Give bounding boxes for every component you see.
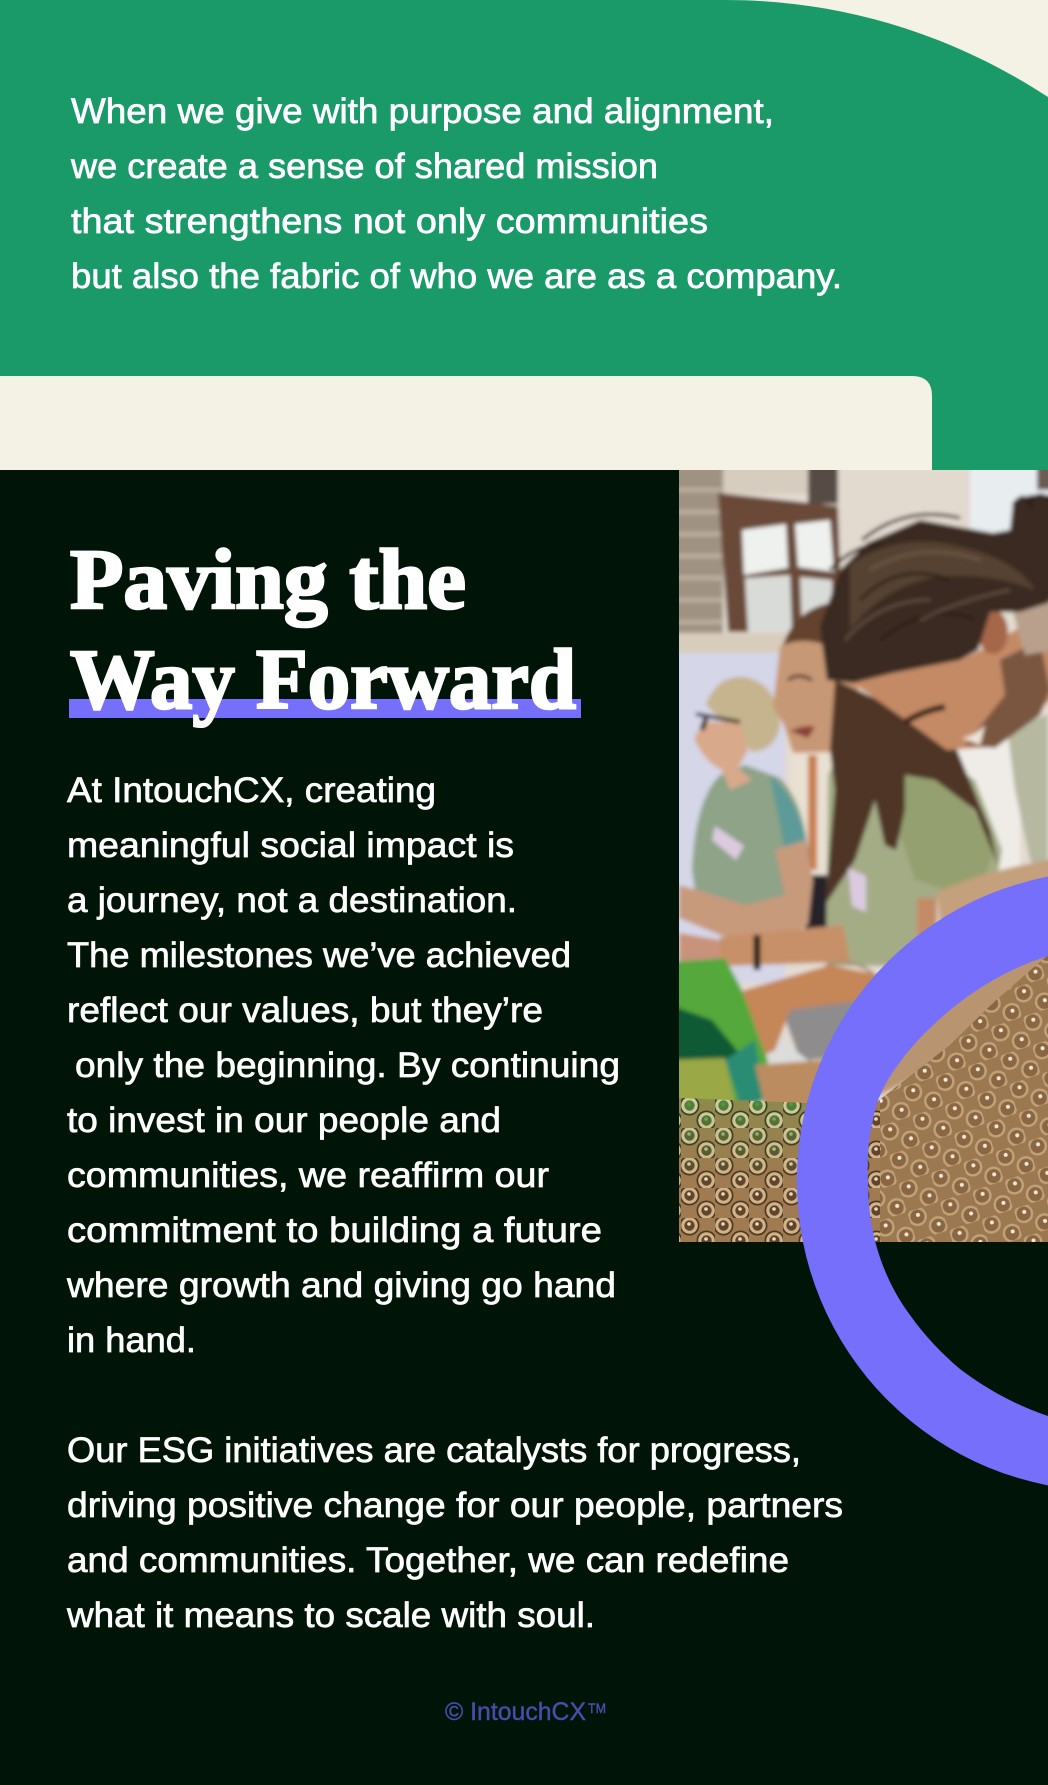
body text: first paragraph: At IntouchCX, creating xyxy=(67,771,436,810)
quote text: but also the fabric of who we are as a company. xyxy=(71,257,842,296)
heading: Paving the Way Forward: Paving the xyxy=(70,531,466,627)
body text: first paragraph: The milestones we’ve achieved xyxy=(67,936,571,975)
decorative purple ring xyxy=(797,871,1048,1491)
footer copyright: © IntouchCX xyxy=(445,1698,586,1726)
body text: second paragraph: driving positive change for our people, partners xyxy=(67,1486,843,1525)
paper bag xyxy=(755,1060,830,1106)
window xyxy=(718,493,842,632)
left woman's arm xyxy=(679,840,813,945)
right woman long hair xyxy=(825,680,998,905)
body text: second paragraph: Our ESG initiatives are catalysts for progress, xyxy=(67,1431,801,1470)
walls xyxy=(722,470,1048,1101)
man's hair xyxy=(820,495,1048,683)
arms xyxy=(720,925,850,966)
ledge and lavender wall xyxy=(670,633,795,653)
body text: first paragraph: meaningful social impact is xyxy=(67,826,514,865)
body text: first paragraph xyxy=(66,771,620,1360)
green bag xyxy=(670,958,768,1104)
footer copyright: TM xyxy=(588,1700,606,1716)
body text: second paragraph: what it means to scale with soul. xyxy=(66,1596,595,1635)
body text: first paragraph: in hand. xyxy=(67,1321,196,1360)
quote text xyxy=(70,92,842,296)
man's shirt xyxy=(1007,715,1048,880)
heading: Paving the Way Forward: Way Forward xyxy=(70,631,576,727)
body text: first paragraph: where growth and giving go hand xyxy=(66,1266,616,1305)
heading underline xyxy=(69,699,581,718)
background: cream top section xyxy=(0,0,1048,470)
body text: first paragraph: only the beginning. By continuing xyxy=(75,1046,620,1085)
quote text: When we give with purpose and alignment, xyxy=(71,92,774,131)
quote text: that strengthens not only communities xyxy=(71,202,708,241)
left woman xyxy=(690,763,807,908)
panel: dark closing section xyxy=(0,470,1048,1785)
body text: first paragraph: to invest in our people and xyxy=(67,1101,501,1140)
right woman face xyxy=(773,624,860,753)
quote text: we create a sense of shared mission xyxy=(70,147,658,186)
photo: volunteers packing bags xyxy=(670,460,1048,1250)
body text: first paragraph: communities, we reaffirm our xyxy=(67,1156,549,1195)
body text: first paragraph: reflect our values, but they’re xyxy=(67,991,543,1030)
heading: Paving the Way Forward xyxy=(69,531,581,727)
man's face xyxy=(854,627,1048,754)
body text: second paragraph: and communities. Together, we can redefine xyxy=(67,1541,789,1580)
silver table area xyxy=(780,1000,860,1060)
name tag xyxy=(848,868,866,912)
body text: first paragraph: a journey, not a destination. xyxy=(67,881,517,920)
box at right xyxy=(934,858,1048,922)
hands in bag xyxy=(740,962,877,1056)
body text: first paragraph: commitment to building a future xyxy=(67,1211,602,1250)
right woman shirt xyxy=(826,735,1002,966)
panel: green quote band xyxy=(0,0,1048,470)
body text: second paragraph xyxy=(66,1431,843,1635)
bubble-wrap texture area xyxy=(679,955,1048,1242)
man's ear xyxy=(978,610,1008,654)
